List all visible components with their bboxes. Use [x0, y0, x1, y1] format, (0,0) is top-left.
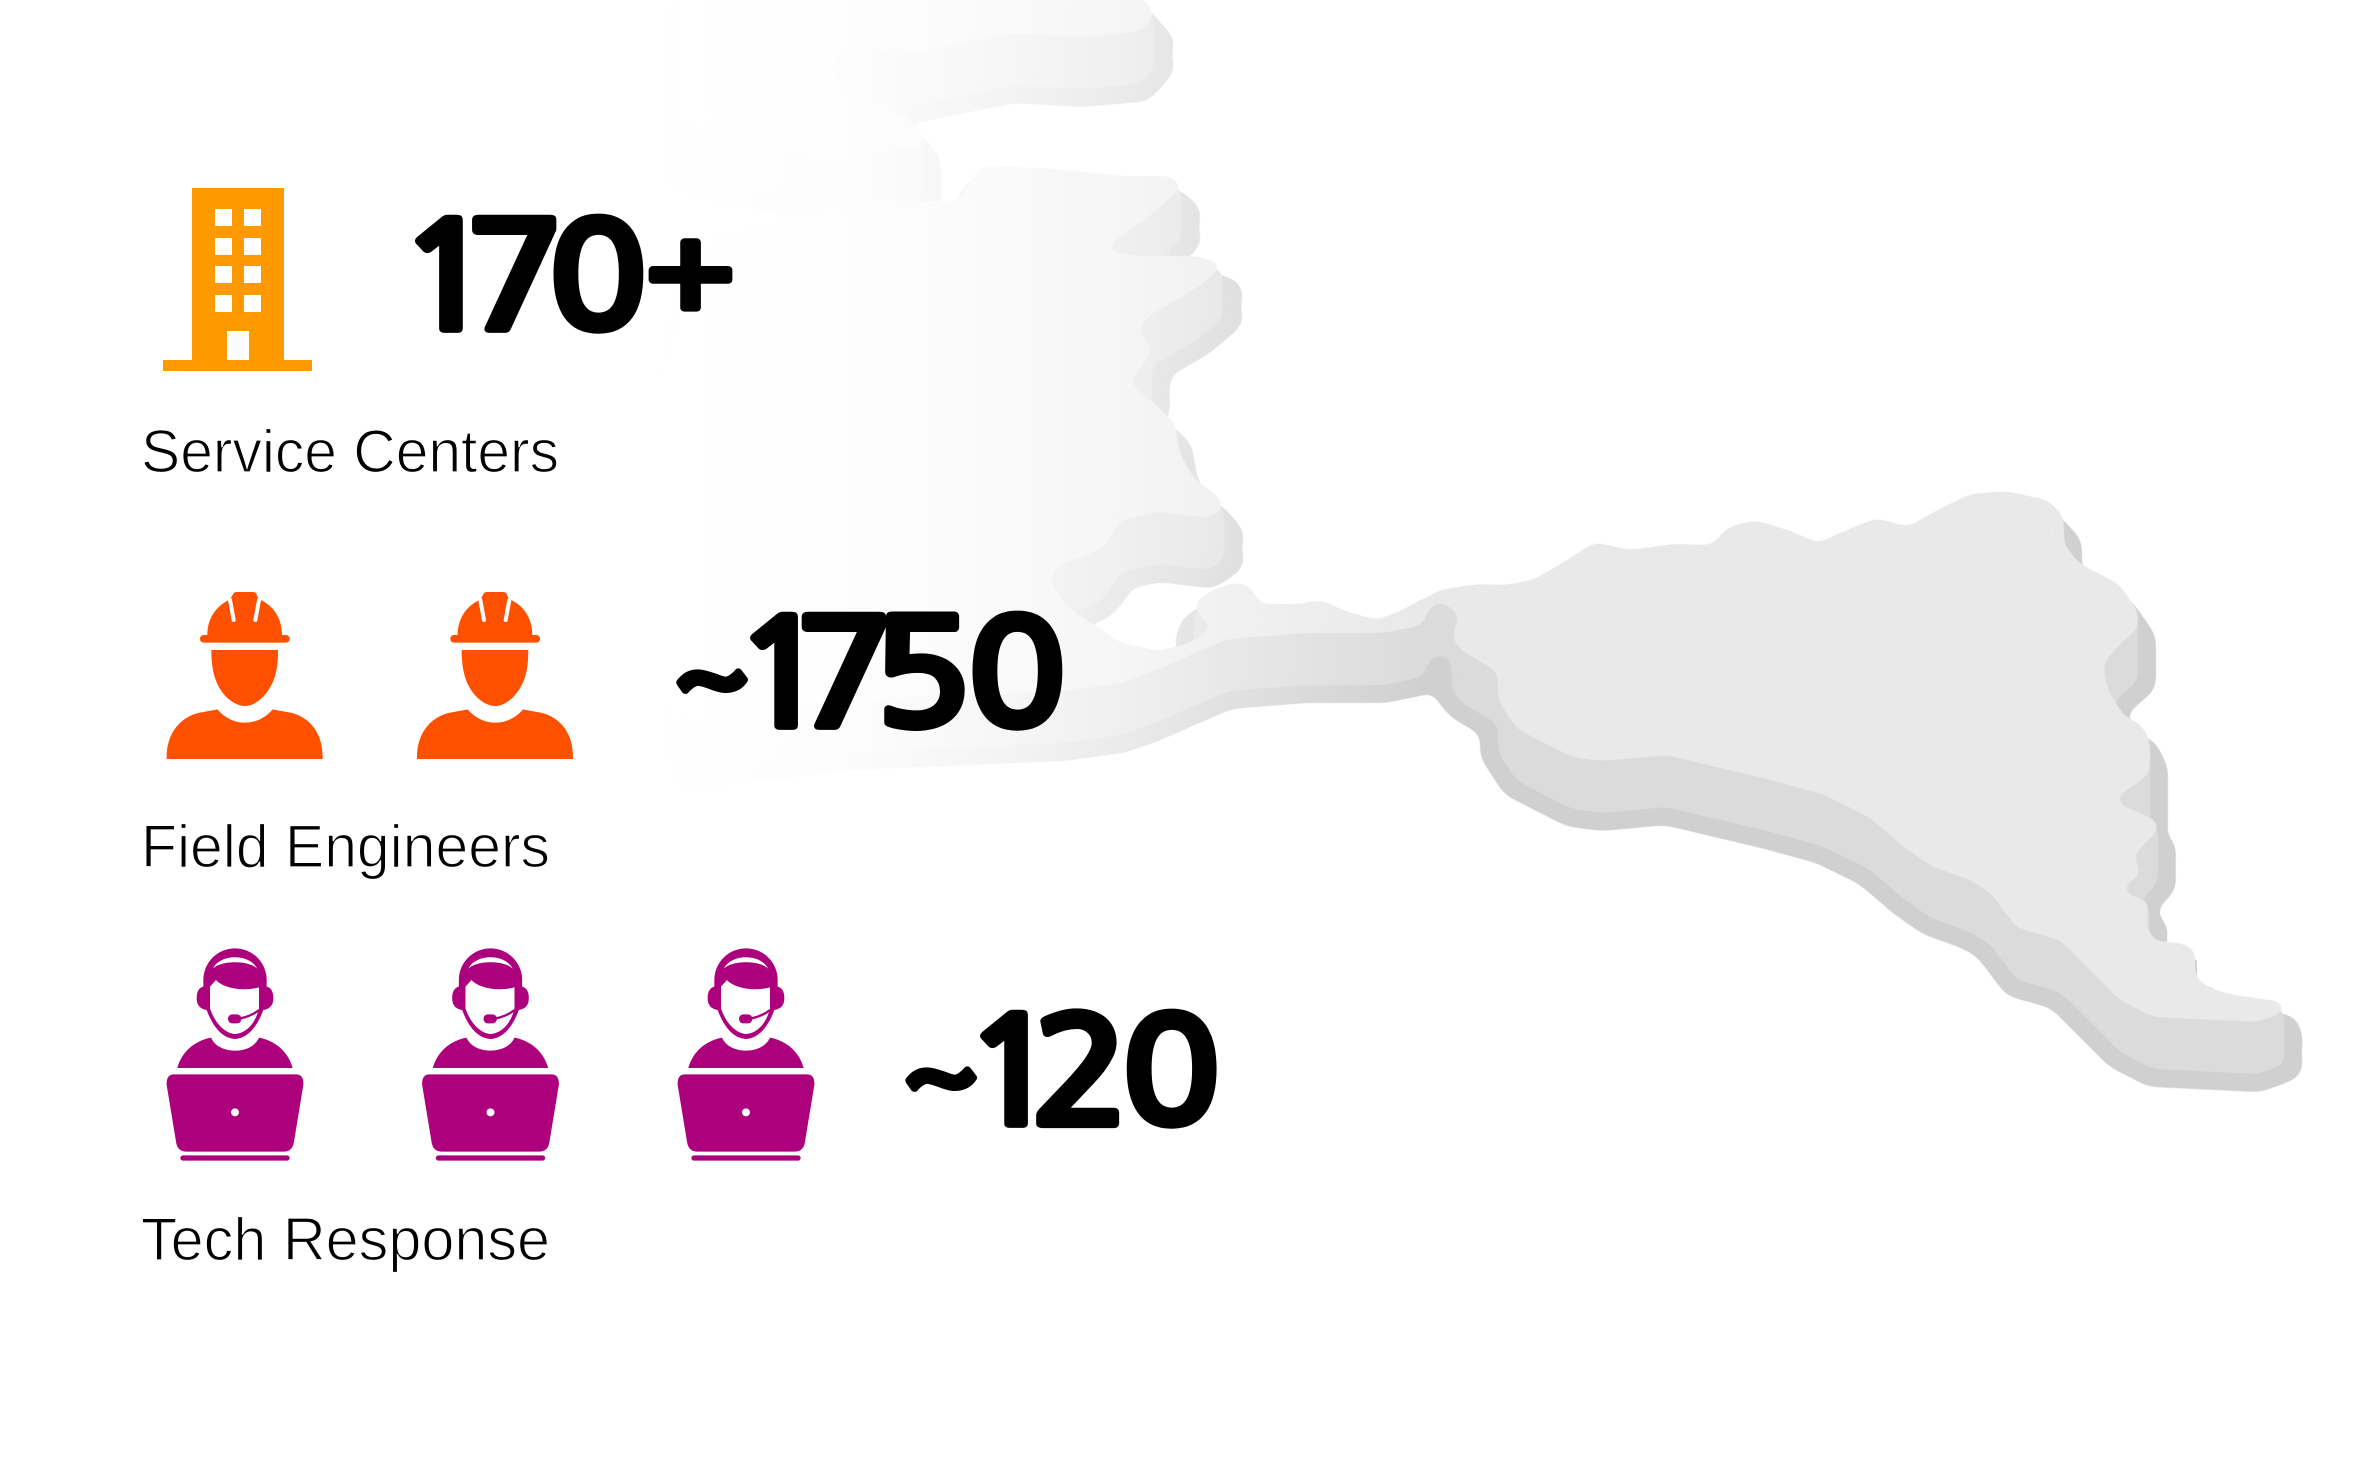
map white fade overlay: [560, 0, 1430, 860]
icon: tech agent 2: [422, 948, 559, 1161]
stat: ~1750: ~: [669, 628, 754, 742]
stat: ~1750: 1750: [731, 601, 1068, 749]
label: Field Engineers: Field Engineers: [141, 813, 550, 880]
label: Tech Response: Tech Response: [141, 1206, 550, 1273]
map side wall layer: [650, 0, 2285, 1074]
stat: 170+: 170: [396, 204, 649, 352]
stat: 170+: +: [644, 217, 736, 341]
icon: tech agent 1: [167, 948, 303, 1161]
stat: ~120: 120: [961, 999, 1222, 1147]
icon: building: [163, 188, 312, 371]
map shadow layer: [650, 20, 2285, 1074]
map top face: [650, 0, 2285, 1022]
stat: ~120: ~: [898, 1026, 983, 1140]
icon: field engineer 2: [417, 592, 573, 759]
icon: tech agent 3: [678, 948, 814, 1161]
icon: field engineer 1: [167, 592, 323, 759]
map: extruded landmass: [560, 0, 2285, 1074]
label: Service Centers: Service Centers: [141, 418, 559, 485]
